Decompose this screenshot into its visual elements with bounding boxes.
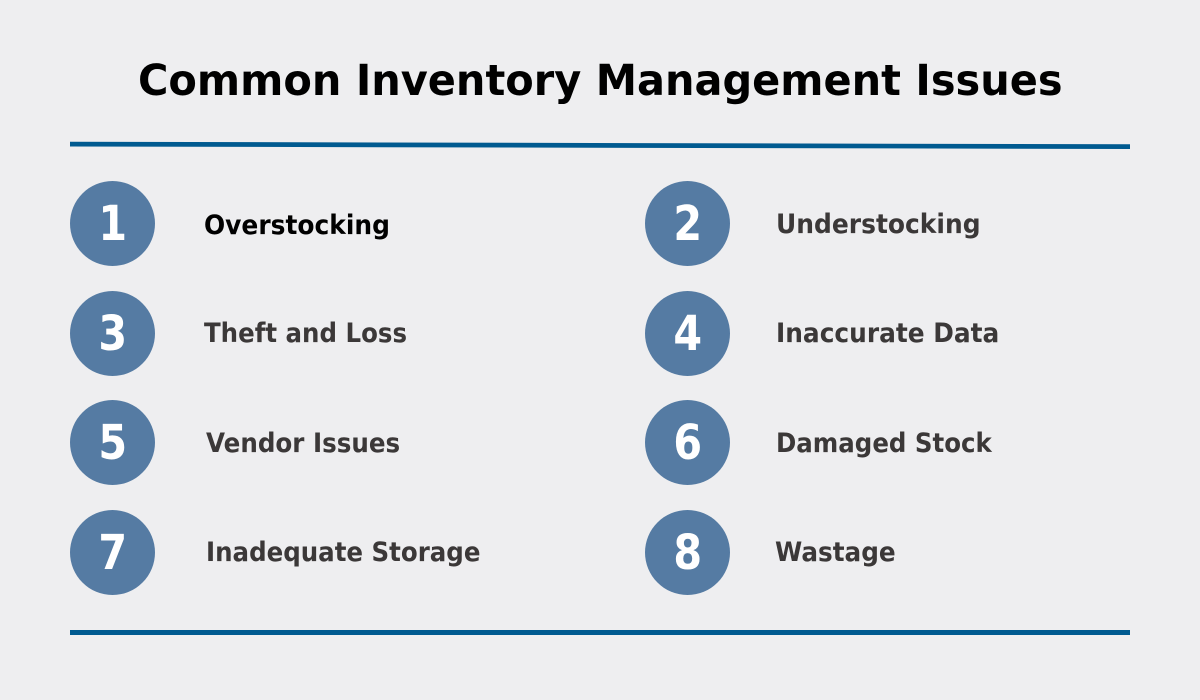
number badge 2 [645, 181, 730, 266]
number badge 3: 3 [98, 306, 127, 362]
label: Understocking [776, 209, 981, 240]
number badge 3 [70, 291, 155, 376]
number badge 5: 5 [98, 415, 127, 471]
label: Theft and Loss [204, 318, 407, 349]
number badge 4: 4 [673, 306, 702, 362]
label: Wastage [775, 537, 896, 568]
title: Common Inventory Management Issues [138, 56, 1063, 106]
label: Inaccurate Data [776, 318, 999, 349]
number badge 5 [70, 400, 155, 485]
bottom divider line [70, 630, 1130, 635]
item 5 [70, 400, 400, 485]
label: Inadequate Storage [206, 537, 480, 568]
number badge 1: 1 [98, 196, 127, 252]
item 1 [70, 181, 390, 266]
number badge 6: 6 [673, 415, 702, 471]
number badge 2: 2 [673, 196, 702, 252]
label: Vendor Issues [206, 428, 400, 459]
number badge 7: 7 [98, 525, 127, 581]
top divider line [70, 142, 1130, 149]
item 4 [645, 291, 999, 376]
number badge 4 [645, 291, 730, 376]
item 3 [70, 291, 407, 376]
number badge 1 [70, 181, 155, 266]
number badge 7 [70, 510, 155, 595]
item 7 [70, 510, 480, 595]
item 6 [645, 400, 992, 485]
item 2 [645, 181, 981, 266]
number badge 6 [645, 400, 730, 485]
label: Overstocking [204, 210, 390, 241]
item 8 [645, 510, 896, 595]
number badge 8 [645, 510, 730, 595]
number badge 8: 8 [673, 525, 702, 581]
label: Damaged Stock [776, 428, 992, 459]
